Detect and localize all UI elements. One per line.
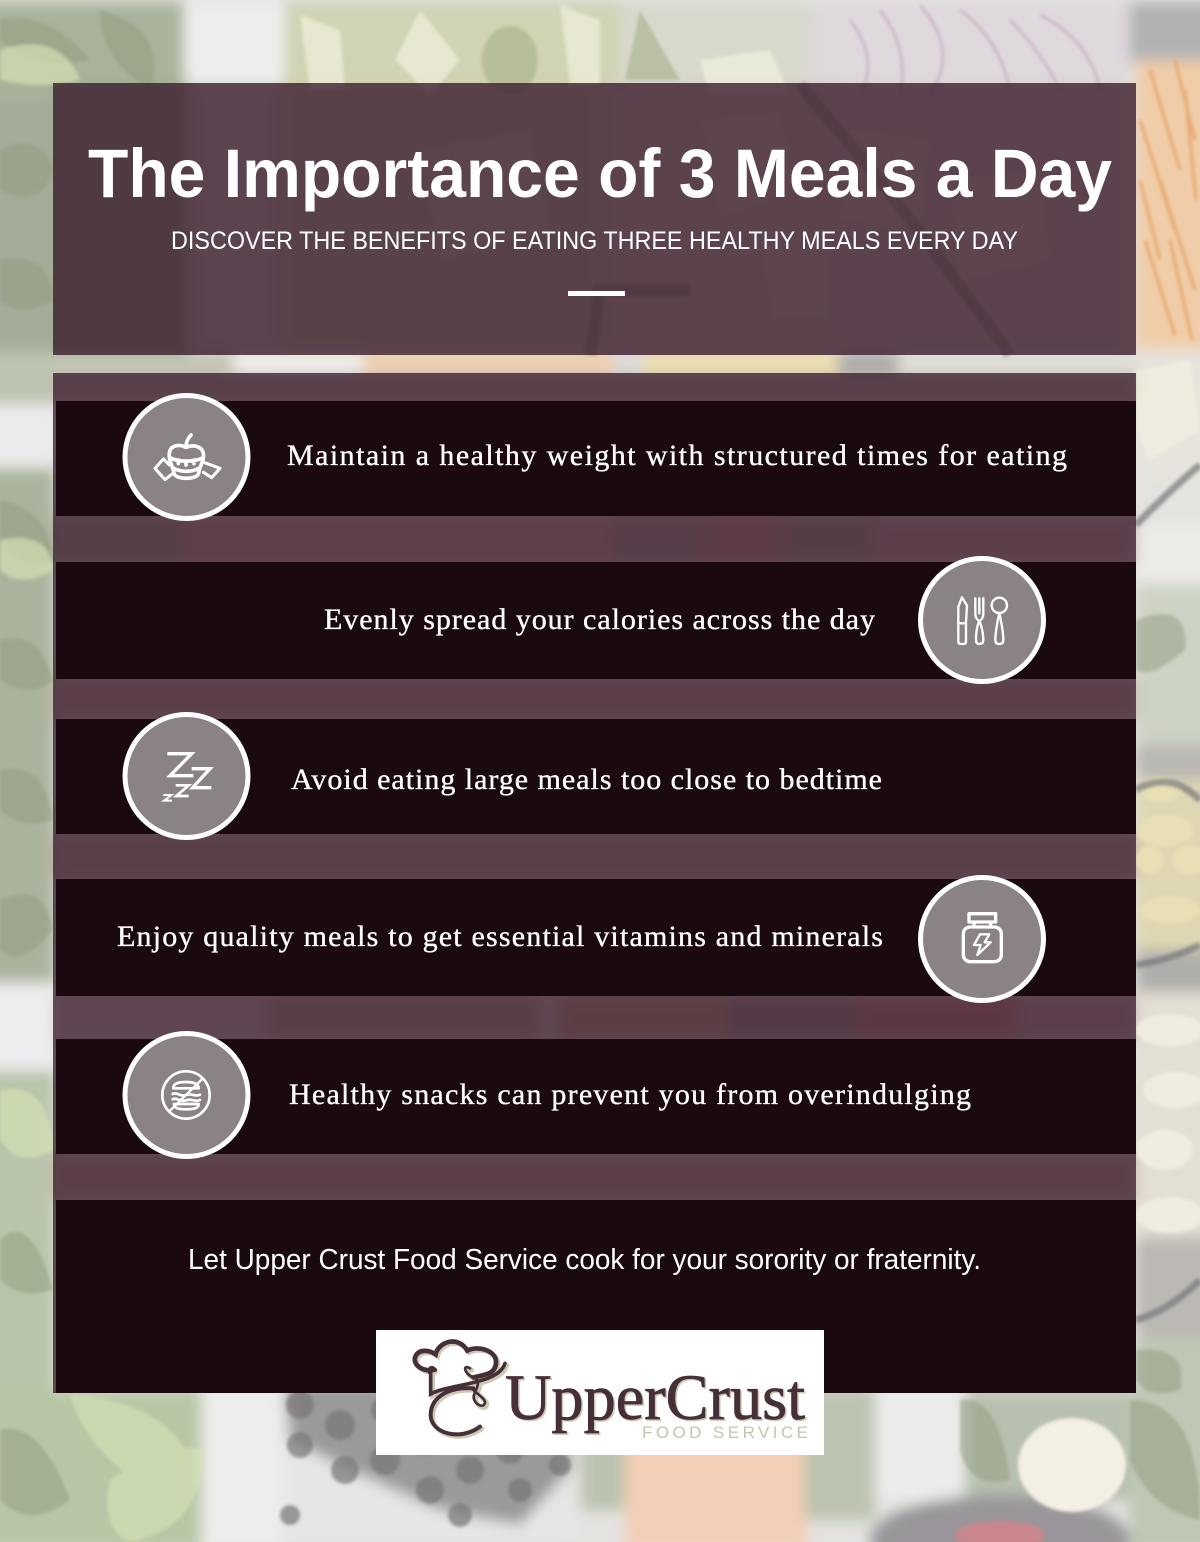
top strip	[0, 2, 184, 102]
shapes seen through the panels	[420, 110, 1050, 320]
closing band	[56, 1200, 1136, 1393]
title divider	[568, 291, 625, 296]
text: spread calories: Evenly spread your calories across the day	[324, 603, 875, 636]
text: quality meals: Enjoy quality meals to get essential vitamins and minerals	[117, 920, 883, 953]
text: healthy snacks: Healthy snacks can prevent you from overindulging	[289, 1078, 971, 1111]
text: healthy weight: Maintain a healthy weight with structured times for eating	[287, 439, 1067, 472]
title: The Importance of 3 Meals a Day	[88, 135, 1112, 212]
under main panel stripes	[53, 373, 1136, 403]
benefit band 2	[56, 562, 1136, 679]
icon: vitamin jar with lightning bolt	[920, 878, 1044, 1000]
icon: apple with measuring tape	[125, 396, 248, 518]
benefit band 1	[56, 401, 1136, 516]
main panel	[53, 373, 1136, 1393]
logo: Upper Crust Food Service	[376, 1330, 824, 1455]
subtitle: DISCOVER THE BENEFITS OF EATING THREE HEALTHY MEALS EVERY DAY	[171, 227, 1018, 255]
icon: sleeping Zs	[125, 714, 248, 838]
left strip	[0, 100, 55, 355]
bottom strip	[0, 1390, 202, 1542]
under header panel	[53, 83, 188, 353]
logo chef hat mark	[415, 1342, 507, 1436]
closing text: Let Upper Crust Food Service cook for your sorority or fraternity.	[188, 1244, 981, 1276]
benefit band 3	[56, 719, 1136, 834]
logo wordmark: UpperCrust	[506, 1364, 806, 1436]
header panel	[53, 83, 1136, 355]
benefit band 5	[56, 1039, 1136, 1154]
logo tagline: FOOD SERVICE	[642, 1423, 808, 1442]
icon: crossed-out burger	[125, 1034, 248, 1156]
benefit band 4	[56, 879, 1136, 996]
strip between panels	[53, 350, 233, 376]
logo wordmark: UpperCrust	[505, 1362, 805, 1434]
icon: knife fork and spoon	[920, 558, 1044, 682]
right strip	[1136, 60, 1200, 360]
text: avoid late meals: Avoid eating large meals too close to bedtime	[291, 763, 882, 796]
